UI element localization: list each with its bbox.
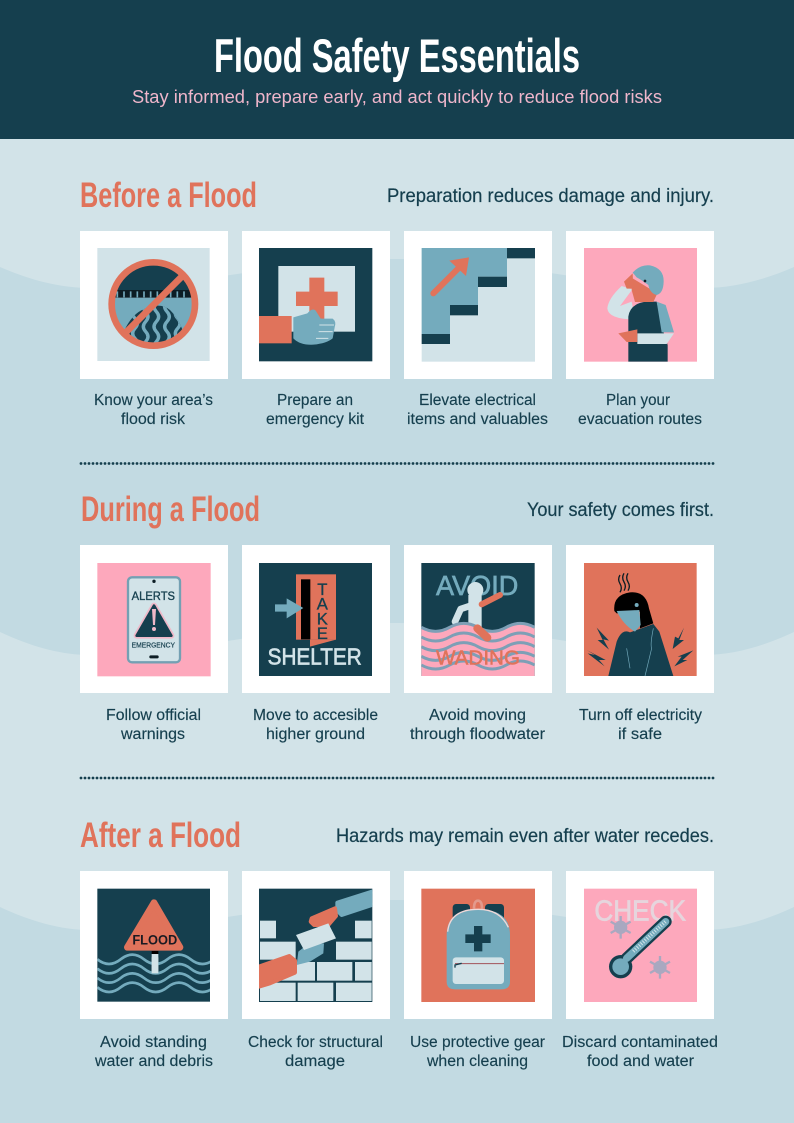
icon: take shelter door: A xyxy=(317,595,329,614)
label: evacuation routes xyxy=(578,411,702,428)
label: Follow official xyxy=(106,707,201,724)
card: official warnings xyxy=(80,545,228,743)
label: Move to accesible xyxy=(253,707,378,724)
icon: stairs with arrow xyxy=(422,248,535,362)
icon: phone with alert: EMERGENCY xyxy=(132,643,175,650)
label: Use protective gear xyxy=(410,1034,545,1051)
label: emergency kit xyxy=(266,411,365,428)
card: turn off electricity xyxy=(566,545,714,743)
subtitle: Stay informed, prepare early, and act quickly to reduce flood risks xyxy=(132,87,662,107)
icon: thermometer and snowflakes xyxy=(584,889,697,1002)
card: higher ground xyxy=(242,545,390,743)
label: flood risk xyxy=(121,411,185,428)
card: know your flood risk xyxy=(80,231,228,428)
card: discard contaminated food xyxy=(562,871,718,1070)
card: emergency kit xyxy=(242,231,390,428)
label xyxy=(248,1034,383,1070)
label xyxy=(94,1034,213,1070)
panel: during a flood xyxy=(80,490,714,743)
label: Check for structural xyxy=(248,1034,383,1051)
label xyxy=(106,707,201,743)
label: higher ground xyxy=(266,726,365,743)
label: food and water xyxy=(587,1053,694,1070)
label: when cleaning xyxy=(426,1053,528,1070)
label xyxy=(266,392,365,428)
icon: flood sign in water xyxy=(97,889,214,1002)
label: Avoid moving xyxy=(429,707,526,724)
heading: before a flood: Before a Flood xyxy=(80,176,257,215)
icon: take shelter door: E xyxy=(317,624,328,643)
icon: crossed-out bridge and water xyxy=(97,248,210,361)
label xyxy=(579,707,702,743)
label: items and valuables xyxy=(407,411,548,428)
icon: phone with alert xyxy=(97,563,211,676)
card: avoid floodwater xyxy=(404,545,552,743)
heading: during a flood: During a Flood xyxy=(81,490,260,529)
icon: flood sign in water: FLOOD xyxy=(132,931,177,947)
header banner xyxy=(0,0,794,139)
label: if safe xyxy=(618,726,662,743)
label: Plan your xyxy=(606,392,670,409)
label xyxy=(410,707,545,743)
icon: take shelter door: SHELTER xyxy=(268,643,362,669)
label: Avoid standing xyxy=(100,1034,207,1051)
icon: avoid wading: WADING xyxy=(436,646,520,669)
tagline: during: Your safety comes first. xyxy=(527,500,714,521)
card: standing water xyxy=(80,871,228,1070)
icon: masked person with lightning xyxy=(584,563,697,676)
label: Discard contaminated xyxy=(562,1034,718,1051)
title: Flood Safety Essentials xyxy=(214,29,580,82)
label: warnings xyxy=(120,726,185,743)
icon: thermometer and snowflakes: CHECK xyxy=(594,896,686,928)
card: structural damage xyxy=(242,871,390,1070)
card: elevate items xyxy=(404,231,552,428)
icon: take shelter door: T xyxy=(317,580,327,599)
label: damage xyxy=(285,1053,345,1070)
label xyxy=(578,392,702,428)
label xyxy=(94,392,213,428)
panel: before a flood xyxy=(80,176,714,428)
label: Prepare an xyxy=(277,392,353,409)
label xyxy=(410,1034,545,1070)
card: protective gear xyxy=(404,871,552,1070)
icon: take shelter door: K xyxy=(317,609,328,628)
label xyxy=(407,392,548,428)
icon: avoid wading: AVOID xyxy=(436,570,518,601)
label: Elevate electrical xyxy=(419,392,536,409)
icon: person looking ahead xyxy=(584,248,697,362)
icon: hands repairing brick wall xyxy=(257,889,375,1002)
icon: take shelter door xyxy=(259,563,372,676)
label xyxy=(253,707,378,743)
label: Turn off electricity xyxy=(579,707,702,724)
heading: after a flood: After a Flood xyxy=(80,816,241,855)
label: Know your area’s xyxy=(94,392,213,409)
icon: hand holding first aid cross xyxy=(259,248,372,361)
icon: avoid wading xyxy=(421,563,535,676)
tagline: after: Hazards may remain even after water recedes. xyxy=(336,826,714,847)
panel: after a flood xyxy=(80,816,718,1070)
icon: first aid backpack xyxy=(421,889,535,1002)
label: water and debris xyxy=(94,1053,213,1070)
card: evacuation routes xyxy=(566,231,714,428)
label xyxy=(562,1034,718,1070)
tagline: before: Preparation reduces damage and injury. xyxy=(387,186,714,207)
icon: phone with alert: ALERTS xyxy=(132,589,175,603)
label: through floodwater xyxy=(410,726,545,743)
